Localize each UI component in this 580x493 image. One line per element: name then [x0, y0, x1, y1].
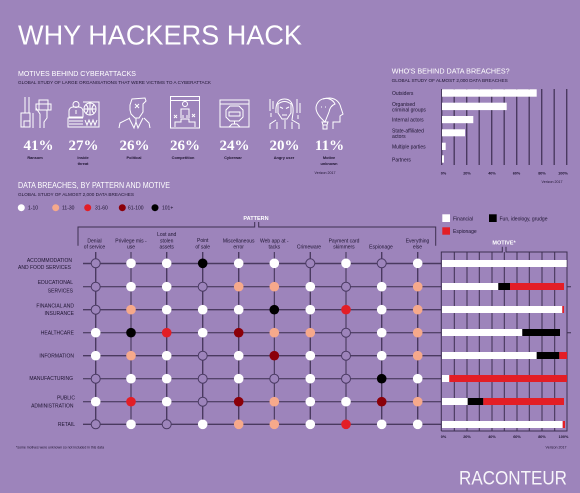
- legend: motives: Fun, ideology, grudge: [500, 216, 548, 222]
- bar: public administration: [442, 398, 564, 405]
- bracket: motive: [441, 241, 567, 431]
- icon: ransom hand and money: [21, 97, 51, 128]
- stat: motive unknown: Motive: [323, 155, 336, 160]
- bar chart: actors: 100%: [558, 172, 568, 176]
- legend: breach counts: 1-10: [28, 206, 38, 212]
- bar chart: actors: Outsiders: [392, 91, 414, 97]
- column labels: patterns: of sale: [195, 244, 210, 250]
- row labels: industries: ACCOMMODATION: [27, 258, 72, 264]
- row labels: industries: INFORMATION: [39, 354, 74, 360]
- stat: motive unknown: [315, 138, 344, 166]
- stat: angry user: 20%: [270, 138, 300, 154]
- bracket: motive: MOTIVE*: [492, 241, 516, 247]
- row labels: industries: MANUFACTURING: [29, 376, 73, 382]
- axis labels: motive: 0%: [441, 435, 447, 439]
- stat: competition: Competition: [172, 155, 195, 160]
- axis labels: motive: 40%: [488, 435, 496, 439]
- bar chart: actors: State-affiliated: [392, 128, 424, 134]
- row labels: industries: PUBLIC: [57, 396, 75, 402]
- bar: educational: [442, 283, 564, 290]
- bar chart: actors: Partners: [392, 158, 411, 164]
- stat: cyberwar: Cyberwar: [224, 155, 242, 160]
- subheading: data breaches: GLOBAL STUDY OF ALMOST 2,000 DATA BREACHES: [18, 192, 134, 197]
- column labels: patterns: stolen: [160, 238, 174, 244]
- legend: breach counts: 61-100: [128, 206, 144, 212]
- row labels: industries: HEALTHCARE: [41, 330, 75, 336]
- column labels: patterns: tacks: [268, 244, 281, 250]
- stat: competition: 26%: [170, 138, 200, 154]
- row: public administration: [91, 397, 423, 407]
- row: healthcare: [91, 328, 423, 338]
- icon: cyberwar stop sign in browser: [220, 100, 249, 127]
- bar chart: actors: 0%: [441, 172, 447, 176]
- row: educational services: [91, 282, 423, 292]
- source: motives: Verizon 2017: [315, 171, 335, 175]
- bar chart: actors: Organised: [392, 102, 415, 108]
- stat: insider threat: Inside: [77, 155, 89, 160]
- heading: data breaches: DATA BREACHES, BY PATTERN AND MOTIVE: [18, 181, 170, 190]
- bar: manufacturing: [442, 375, 567, 382]
- bar: accommodation: [442, 260, 567, 267]
- row: retail: [91, 420, 423, 429]
- column labels: patterns: error: [233, 244, 244, 250]
- source: motive chart: Verizon 2017: [546, 446, 566, 450]
- column labels: patterns: of service: [84, 244, 105, 250]
- axis labels: motive: 80%: [538, 435, 546, 439]
- row labels: industries: AND FOOD SERVICES: [18, 265, 72, 271]
- row: manufacturing: [91, 374, 423, 384]
- row labels: industries: ADMINISTRATION: [31, 404, 74, 410]
- bar chart: actors: 20%: [463, 172, 471, 176]
- icon: angry user hooded: [270, 99, 300, 129]
- icon: insider threat badge and globe: [68, 102, 99, 127]
- column labels: patterns: Denial: [87, 238, 102, 244]
- column labels: patterns: Privilege mis -: [115, 238, 147, 244]
- column labels: patterns: use: [127, 244, 135, 250]
- row labels: industries: EDUCATIONAL: [38, 280, 73, 286]
- footnote: *some motives were unknown so not included in this data: [16, 446, 105, 450]
- logo: Raconteur: RACONTEUR: [459, 468, 567, 489]
- icon: political figure: [119, 98, 150, 128]
- icon: motive unknown head and bulb: [316, 98, 343, 129]
- icon: competition podium: [170, 96, 200, 128]
- legend: breach counts: [18, 204, 173, 212]
- row: financial and insurance: [91, 305, 423, 315]
- row labels: industries: SERVICES: [48, 288, 74, 294]
- stacked bars: motive by industry: [441, 252, 571, 439]
- stat: political: 26%: [120, 138, 150, 154]
- bar chart: actors: 40%: [488, 172, 496, 176]
- bracket: pattern: [78, 216, 436, 246]
- bar: information: [442, 352, 567, 359]
- stat: insider threat: 27%: [68, 138, 98, 154]
- legend: motives: Espionage: [453, 229, 477, 235]
- legend: breach counts: 11-30: [62, 206, 75, 212]
- column labels: patterns: Espionage: [369, 244, 393, 250]
- bar: financial: [442, 306, 564, 313]
- bar: retail: [442, 421, 565, 428]
- column labels: patterns: Lost and: [157, 232, 177, 238]
- axis labels: motive: 60%: [513, 435, 521, 439]
- stat: motive unknown: unknown: [320, 161, 338, 166]
- source: who's behind: Verizon 2017: [542, 180, 562, 184]
- bar chart: actors: Internal actors: [392, 118, 424, 124]
- row labels: industries: [18, 258, 75, 428]
- legend: motives: [442, 214, 548, 235]
- row labels: industries: RETAIL: [58, 422, 75, 428]
- stat: motive unknown: 11%: [315, 138, 344, 154]
- subheading: motives: GLOBAL STUDY OF LARGE ORGANISATIONS THAT WERE VICTIMS TO A CYBERATTACK: [18, 80, 212, 85]
- column labels: patterns: Everything: [406, 238, 430, 244]
- panel: motives behind cyberattacks: [18, 69, 344, 175]
- stat: political: Political: [127, 155, 141, 160]
- column labels: patterns: Payment card: [329, 238, 360, 244]
- bar chart: actors: Multiple parties: [392, 144, 426, 150]
- heading: motives: MOTIVES BEHIND CYBERATTACKS: [18, 69, 136, 78]
- column labels: patterns: [84, 232, 430, 250]
- matrix: pattern by industry: [83, 252, 441, 429]
- legend: breach counts: 31-60: [95, 206, 108, 212]
- column labels: patterns: Point: [197, 238, 209, 244]
- column labels: patterns: assets: [159, 244, 174, 250]
- bracket: pattern: PATTERN: [243, 216, 269, 222]
- legend: breach counts: 101+: [162, 206, 173, 212]
- stat: insider threat: [68, 138, 98, 166]
- bar chart: actors: criminal groups: [392, 108, 426, 114]
- row labels: industries: INSURANCE: [45, 311, 75, 317]
- stat: angry user: Angry user: [274, 155, 295, 160]
- row labels: industries: FINANCIAL AND: [36, 304, 74, 310]
- column labels: patterns: Web app at -: [260, 238, 289, 244]
- panel: data breaches by pattern and motive: [16, 181, 571, 450]
- column labels: patterns: Crimeware: [297, 244, 321, 250]
- bar chart: actors: [392, 89, 568, 176]
- title: WHY HACKERS HACK: [18, 20, 302, 50]
- legend: motives: Financial: [453, 216, 473, 222]
- heading: who's behind: WHO'S BEHIND DATA BREACHES?: [392, 66, 510, 76]
- bar chart: actors: actors: [392, 134, 406, 140]
- row: accommodation and food services: [91, 258, 423, 268]
- axis labels: motive: [441, 435, 569, 439]
- stat: ransom: 41%: [24, 138, 54, 154]
- axis labels: motive: 100%: [559, 435, 569, 439]
- bar: healthcare: [442, 329, 560, 336]
- stat: insider threat: threat: [78, 161, 89, 166]
- column labels: patterns: skimmers: [333, 244, 355, 250]
- row: information: [91, 351, 423, 361]
- column labels: patterns: else: [413, 244, 422, 250]
- axis labels: motive: 20%: [463, 435, 471, 439]
- panel: who's behind data breaches: [392, 66, 568, 184]
- bar chart: actors: 60%: [513, 172, 521, 176]
- stat: cyberwar: 24%: [220, 138, 250, 154]
- bar chart: actors: 80%: [538, 172, 546, 176]
- stat: ransom: Ransom: [27, 155, 43, 160]
- column labels: patterns: Miscellaneous: [223, 238, 255, 244]
- subheading: who's behind: GLOBAL STUDY OF ALMOST 2,000 DATA BREACHES: [392, 78, 508, 83]
